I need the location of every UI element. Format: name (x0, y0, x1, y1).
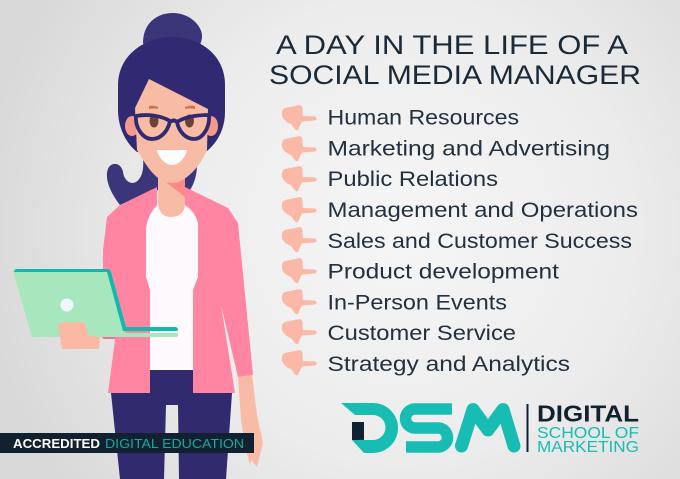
title (269, 30, 641, 90)
item: Strategy and Analytics: Strategy and Analytics (328, 352, 570, 376)
cardigan left (103, 187, 157, 393)
logo wordmark: SCHOOL OF (537, 425, 639, 442)
logo letter D (341, 403, 398, 453)
hair tail (107, 150, 197, 205)
face (135, 79, 208, 183)
item: Management and Operations: Management and Operations (328, 198, 638, 222)
laptop (13, 269, 178, 337)
logo divider (526, 404, 528, 452)
logo wordmark (537, 400, 639, 456)
logo: Digital School of Marketing (341, 400, 639, 456)
trousers (111, 370, 232, 479)
shirt (146, 205, 198, 370)
logo wordmark: MARKETING (537, 439, 639, 456)
banner: ACCREDITED (13, 437, 100, 451)
hair bun (143, 13, 202, 46)
item: Product development: Product development (328, 260, 559, 284)
arm hand (238, 375, 263, 467)
item: Marketing and Advertising: Marketing and Advertising (328, 136, 610, 160)
banner: DIGITAL EDUCATION (105, 437, 244, 451)
item: Public Relations (282, 166, 498, 191)
item: Public Relations: Public Relations (328, 167, 498, 191)
item: Customer Service: Customer Service (328, 321, 516, 345)
glasses (136, 115, 209, 139)
logo letter M (462, 410, 514, 446)
title: A DAY IN THE LIFE OF A (276, 30, 628, 60)
list: departments (282, 105, 638, 376)
logo wordmark: DIGITAL (537, 400, 639, 426)
hand under laptop (58, 322, 100, 349)
eyebrows (149, 106, 195, 109)
title: SOCIAL MEDIA MANAGER (269, 60, 641, 90)
logo square (352, 422, 364, 440)
banner (0, 433, 254, 453)
smile (157, 150, 187, 165)
item: In-Person Events: In-Person Events (328, 290, 507, 314)
cardigan cuff (102, 334, 116, 339)
neck shadow (158, 176, 185, 197)
item: Customer Service (282, 319, 516, 345)
item: Strategy and Analytics (282, 350, 570, 376)
item: Sales and Customer Success: Sales and Customer Success (328, 229, 632, 253)
cardigan right (185, 187, 253, 393)
item: Product development (282, 258, 559, 284)
neck (158, 170, 185, 217)
ears (125, 116, 218, 136)
item: Human Resources: Human Resources (328, 106, 519, 130)
eyes (150, 114, 194, 128)
illustration: woman with laptop (13, 13, 263, 479)
logo letter S (406, 409, 452, 447)
hair (118, 37, 225, 152)
item: In-Person Events (282, 289, 507, 314)
